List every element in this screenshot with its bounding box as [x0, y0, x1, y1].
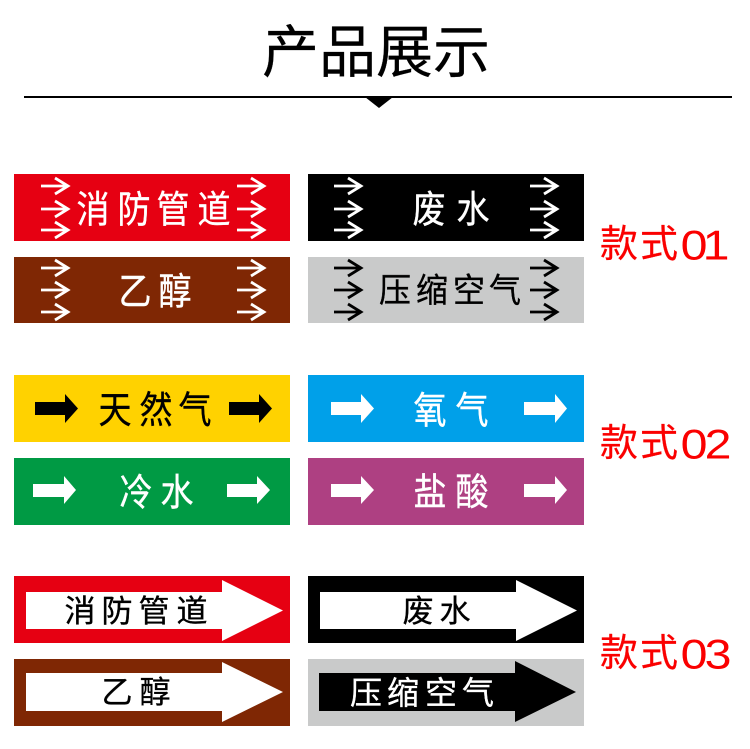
- label: style 02: 款式: [600, 423, 678, 465]
- panel: style 03 black sign: [308, 576, 584, 643]
- panel: style 03 brown sign: [14, 659, 290, 726]
- panel: style 01 brown sign: [14, 257, 290, 323]
- text: cold water: 冷水: [119, 473, 194, 514]
- panel: style 03 red sign: [14, 576, 290, 643]
- label: style 03: 0: [681, 630, 707, 678]
- panel: style 02 yellow sign: [14, 375, 290, 442]
- label: style 03: [600, 630, 731, 678]
- text: ethanol: 乙醇: [102, 675, 170, 710]
- text: hydrochloric acid: 盐酸: [413, 472, 489, 513]
- arrow: black: [319, 661, 576, 722]
- arrow: white: [320, 580, 577, 641]
- arrow: white: [26, 580, 283, 641]
- arrow: white: [26, 662, 283, 722]
- label: style 02: 0: [681, 420, 707, 468]
- label: style 03: 3: [705, 630, 731, 678]
- panel: style 02 purple sign: [308, 458, 584, 525]
- panel: style 03 grey sign: [308, 659, 584, 726]
- text: ethanol: 乙醇: [118, 272, 192, 313]
- text: fire pipeline: 消防管道: [64, 594, 208, 629]
- panel: style 02 green sign: [14, 458, 290, 525]
- label: style 01: [600, 221, 729, 269]
- icon: block arrows: [331, 394, 567, 423]
- label: style 02: [600, 420, 731, 468]
- icon: triple arrows: [41, 260, 264, 320]
- text: oxygen: 氧气: [413, 391, 489, 432]
- panel: style 02 blue sign: [308, 375, 584, 442]
- label: style 02: 2: [705, 420, 731, 468]
- text: compressed air: 压缩空气: [379, 271, 521, 309]
- text: natural gas: 天然气: [98, 390, 212, 431]
- icon: triple arrows: [334, 178, 557, 238]
- icon: block arrows: [331, 476, 567, 504]
- text: waste water: 废水: [402, 594, 470, 629]
- text: compressed air: 压缩空气: [350, 675, 494, 711]
- icon: block arrows: [33, 476, 270, 504]
- text: fire pipeline: 消防管道: [76, 190, 231, 231]
- panel: style 01 black sign: [308, 174, 584, 241]
- panel: style 01 grey sign: [308, 257, 584, 323]
- title: 产品展示: [262, 21, 490, 85]
- text: waste water: 废水: [412, 190, 490, 231]
- label: style 03: 款式: [600, 633, 678, 675]
- label: style 01: 1: [703, 221, 729, 269]
- icon: block arrows: [35, 394, 272, 423]
- label: style 01: 0: [681, 221, 707, 269]
- panel: style 01 red sign: [14, 174, 290, 241]
- icon: triple arrows: [41, 178, 264, 238]
- label: style 01: 款式: [600, 224, 678, 266]
- icon: triple arrows: [334, 260, 557, 320]
- title divider with pointer: [24, 96, 732, 108]
